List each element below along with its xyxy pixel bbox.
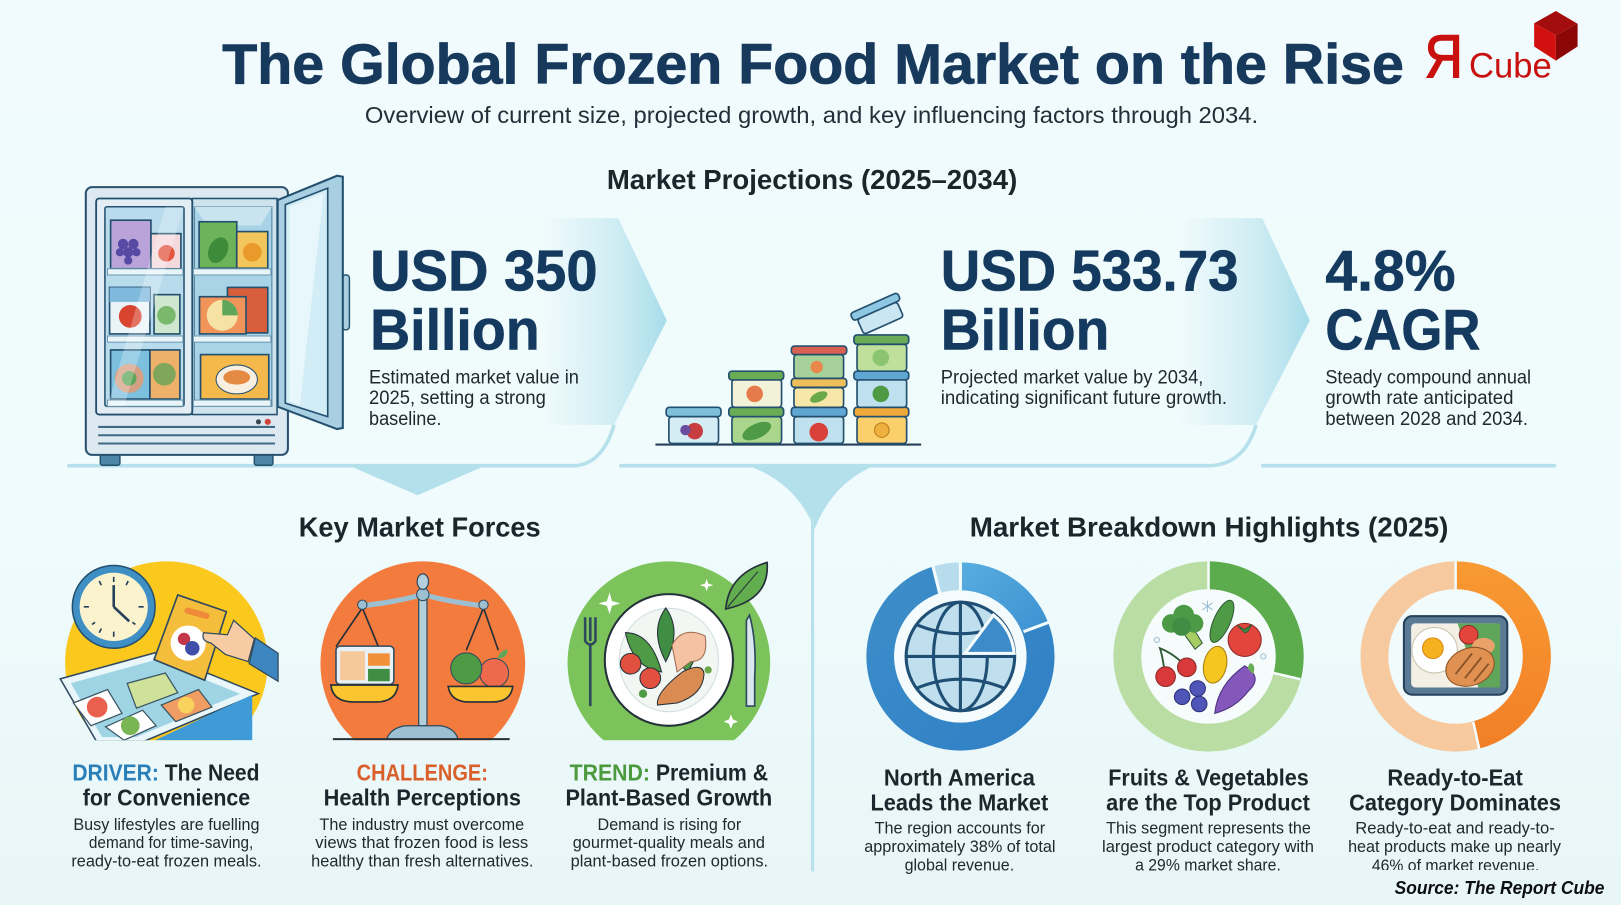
stat: 4.8% CAGR: [1325, 240, 1531, 430]
stat: USD 533.73 Billion: indicating significant future growth.: [941, 388, 1227, 409]
text: fruits and vegetables: This segment represents the: [1106, 818, 1311, 837]
stat: USD 350 Billion: Billion: [370, 298, 540, 362]
icon: ready meal tray: [1404, 616, 1507, 695]
stat: 4.8% CAGR: growth rate anticipated: [1325, 388, 1513, 409]
logo: RCube: Я: [1425, 24, 1463, 91]
title: The Global Frozen Food Market on the Rise: [222, 34, 1404, 97]
text: driver: DRIVER: The Need: [72, 760, 259, 786]
text: challenge: [311, 760, 533, 870]
text: fruits and vegetables: [1102, 765, 1314, 874]
heading: market breakdown highlights: Market Breakdown Highlights (2025): [970, 512, 1448, 543]
arrow: connector funnel and divider: [753, 467, 870, 872]
logo: RCube: Cube: [1469, 47, 1552, 86]
text: trend: Demand is rising for: [598, 815, 742, 834]
text: north america: approximately 38% of total: [864, 837, 1056, 856]
heading: market projections: Market Projections (2025–2034): [607, 164, 1017, 195]
stat: 4.8% CAGR: 4.8%: [1325, 240, 1456, 304]
arrow: first chevron: [67, 218, 667, 495]
stat: USD 350 Billion: Estimated market value in: [369, 368, 579, 389]
text: challenge: views that frozen food is less: [315, 833, 528, 852]
stat: USD 533.73 Billion: Billion: [941, 298, 1109, 362]
icon: freezer with open door: [86, 176, 349, 465]
logo: RCube: [1425, 11, 1578, 91]
text: fruits and vegetables: Fruits & Vegetables: [1108, 765, 1309, 791]
icon: trend plated meal illustration: [568, 561, 770, 740]
text: ready-to-eat: Category Dominates: [1349, 790, 1561, 816]
text: north america: [864, 765, 1056, 874]
text: challenge: The industry must overcome: [319, 815, 524, 834]
icon: challenge balance scale illustration: [320, 561, 526, 740]
text: trend: TREND: Premium &: [570, 760, 768, 786]
text: trend: gourmet-quality meals and: [573, 833, 765, 852]
text: fruits and vegetables: are the Top Product: [1106, 790, 1310, 816]
chart: ready-to-eat donut 46%: [1374, 561, 1551, 750]
text: driver: ready-to-eat frozen meals.: [71, 851, 262, 870]
text: driver: for Convenience: [83, 784, 250, 810]
icon: fruits and vegetables: [1154, 597, 1266, 713]
chart: North America donut 38%: [866, 562, 1055, 751]
text: driver: [71, 760, 262, 870]
stat: USD 533.73 Billion: Projected market value by 2034,: [941, 368, 1203, 389]
stat: USD 350 Billion: USD 350: [370, 240, 598, 304]
stat: USD 350 Billion: baseline.: [369, 409, 441, 430]
text: driver: demand for time-saving,: [89, 833, 253, 852]
icon: driver convenience illustration: [65, 561, 278, 764]
icon: globe with pie wedge: [906, 602, 1015, 711]
chart: fruits and vegetables donut 29%: [1127, 561, 1304, 738]
text: trend: plant-based frozen options.: [571, 851, 768, 870]
subtitle: Overview of current size, projected growth, and key influencing factors through 2034.: [365, 102, 1258, 128]
text: trend: Plant-Based Growth: [565, 784, 772, 810]
text: challenge: healthy than fresh alternatives.: [311, 851, 533, 870]
text: ready-to-eat: Ready-to-Eat: [1387, 765, 1523, 791]
text: driver: Busy lifestyles are fuelling: [73, 815, 259, 834]
text: north america: North America: [884, 765, 1035, 791]
text: north america: global revenue.: [905, 855, 1014, 874]
stat: 4.8% CAGR: between 2028 and 2034.: [1325, 409, 1528, 430]
text: fruits and vegetables: a 29% market share.: [1135, 855, 1281, 874]
icon: stacked food containers: [655, 292, 921, 445]
text: fruits and vegetables: largest product category with: [1102, 837, 1314, 856]
text: ready-to-eat: heat products make up nearly: [1348, 837, 1561, 856]
stat: USD 350 Billion: 2025, setting a strong: [369, 388, 546, 409]
text: north america: Leads the Market: [870, 790, 1049, 816]
text: ready-to-eat: 46% of market revenue.: [1372, 856, 1539, 875]
text: challenge: CHALLENGE:: [357, 760, 488, 786]
stat: USD 350 Billion: [369, 240, 598, 430]
stat: USD 533.73 Billion: [941, 240, 1238, 409]
text: trend: [565, 760, 772, 870]
heading: key market forces: Key Market Forces: [299, 512, 541, 543]
text: challenge: Health Perceptions: [324, 784, 521, 810]
stat: USD 533.73 Billion: USD 533.73: [941, 240, 1238, 304]
stat: 4.8% CAGR: Steady compound annual: [1325, 368, 1531, 389]
arrow: second chevron: [619, 218, 1556, 466]
stat: 4.8% CAGR: CAGR: [1325, 298, 1480, 362]
text: ready-to-eat: [1348, 765, 1561, 875]
text: ready-to-eat: Ready-to-eat and ready-to-: [1355, 818, 1555, 837]
source note: Source: The Report Cube: [1395, 877, 1604, 898]
text: north america: The region accounts for: [875, 818, 1045, 837]
